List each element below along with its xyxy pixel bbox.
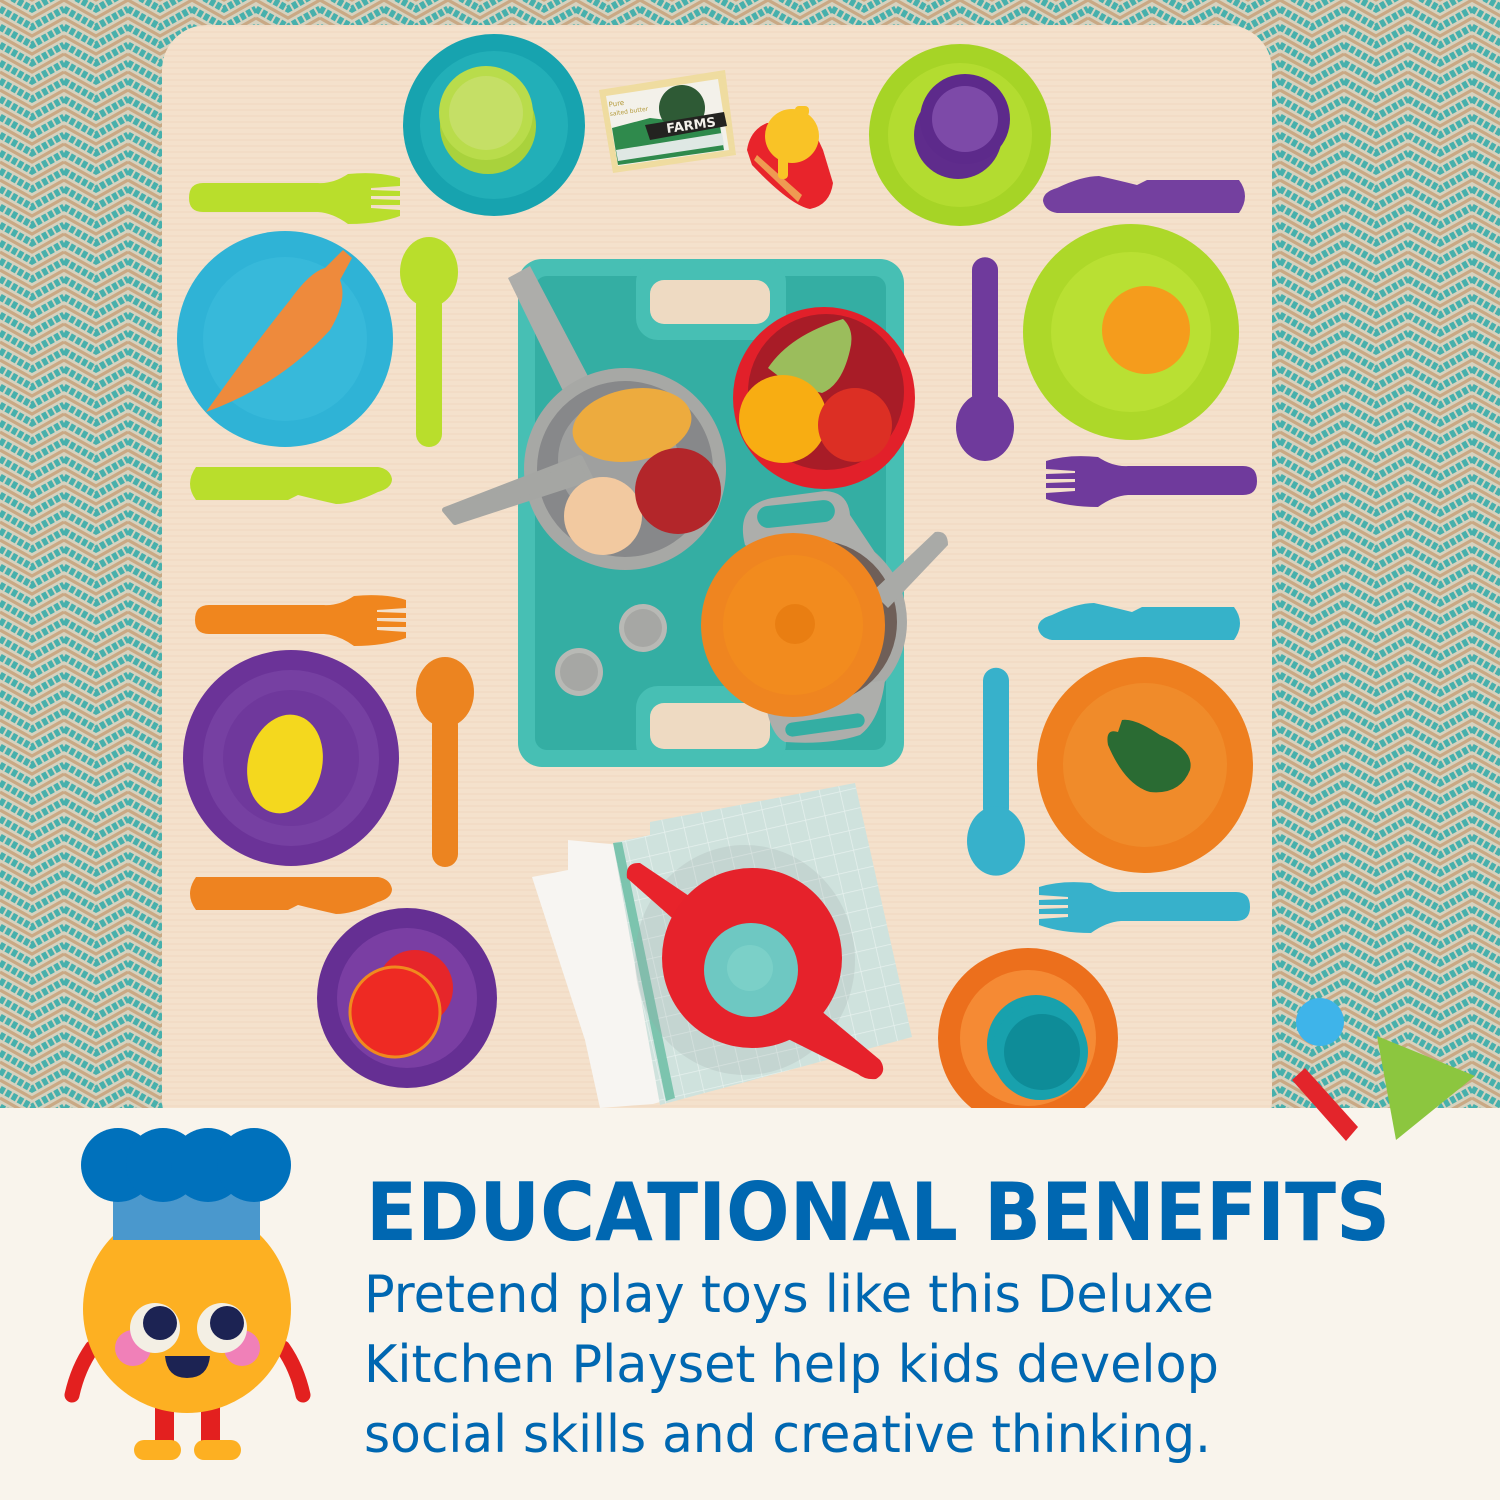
icon: butter box: FARMS	[665, 115, 717, 137]
icon: lime plate	[1023, 224, 1239, 440]
icon: lemon	[237, 707, 333, 821]
icon: orange spoon	[416, 657, 474, 867]
icon: silver pot and handles	[723, 491, 948, 743]
icon: lime plate with purple cup	[869, 44, 1051, 226]
icon: butter box: salted butter	[609, 106, 649, 118]
group: decorative shapes	[1292, 998, 1475, 1141]
icon: orange fork	[195, 595, 406, 646]
icon: butter box	[599, 70, 736, 173]
icon: burner knobs	[555, 604, 667, 696]
icon: blue spoon	[967, 668, 1025, 876]
icon: blue circle	[1296, 998, 1344, 1046]
group: top cups and plates	[403, 34, 1051, 226]
heading: EDUCATIONAL BENEFITS	[366, 1166, 1390, 1259]
icon: green triangle	[1377, 1036, 1475, 1140]
group: top-left place setting	[177, 173, 458, 504]
icon: red bar	[1292, 1068, 1358, 1141]
group: towel and teapot	[532, 783, 912, 1108]
icon: blue plate	[177, 231, 393, 447]
icon: pan vegetables	[445, 379, 721, 555]
group: centre tray with cookware	[445, 259, 948, 767]
icon: bowl fruit	[739, 319, 892, 463]
icon: orange knife	[190, 877, 392, 914]
text block: description: Kitchen Playset help kids develop	[364, 1335, 1219, 1395]
icon: lime fork	[189, 173, 400, 224]
icon: butter box: Pure	[608, 99, 625, 109]
icon: purple fork	[1046, 456, 1257, 507]
icon: purple plate with red cup	[317, 908, 497, 1088]
icon: red teapot	[627, 863, 883, 1079]
icon: orange pot lid	[701, 533, 885, 717]
background: woven rug	[0, 0, 1500, 1110]
icon: lime spoon	[400, 237, 458, 447]
icon: blue fork	[1039, 882, 1250, 933]
text block: description: social skills and creative thinking.	[364, 1405, 1211, 1465]
icon: silver pan	[508, 266, 726, 570]
icon: ketchup bottle	[747, 106, 833, 209]
icon: towel	[532, 783, 912, 1108]
group: lower-left place setting	[183, 595, 497, 1088]
group: lower-right place setting	[938, 603, 1253, 1128]
icon: orange plate with teal cup	[938, 948, 1118, 1128]
icon: orange plate	[1037, 657, 1253, 873]
icon: green pepper	[1107, 720, 1191, 792]
panel: wooden table	[162, 25, 1272, 1145]
text block: description	[364, 1265, 1219, 1465]
icon: teal plate with lime cup	[403, 34, 585, 216]
icon: teal tray	[518, 259, 904, 767]
icon: purple knife	[1043, 176, 1245, 213]
icon: purple spoon	[956, 257, 1014, 461]
icon: blue knife	[1038, 603, 1240, 640]
icon: orange fruit	[1102, 286, 1190, 374]
icon: red bowl	[733, 307, 915, 489]
icon: carrot	[206, 250, 352, 412]
icon: lime knife	[190, 467, 392, 504]
icon: chef mascot	[72, 1128, 303, 1460]
group: top-right place setting	[956, 176, 1257, 507]
text block: description: Pretend play toys like this Deluxe	[364, 1265, 1214, 1325]
panel: footer background	[0, 1108, 1500, 1500]
icon: purple plate	[183, 650, 399, 866]
